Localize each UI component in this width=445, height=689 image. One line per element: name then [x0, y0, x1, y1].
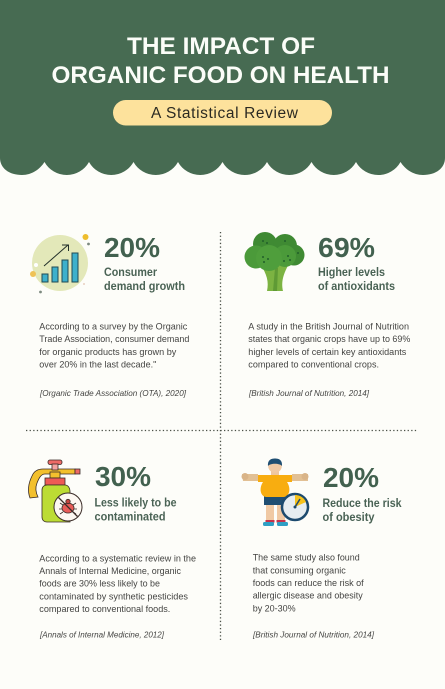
label: [104, 267, 185, 293]
description: over 20% in the last decade.": [39, 360, 156, 370]
description: Annals of Internal Medicine, organic: [39, 566, 181, 576]
panel: less contaminated: [29, 460, 196, 640]
description: Trade Association, consumer demand: [39, 334, 189, 344]
label: Higher levels: [318, 267, 385, 279]
description: foods can reduce the risk of: [253, 578, 364, 588]
panel: consumer demand growth: [30, 232, 189, 398]
citation: [British Journal of Nutrition, 2014]: [248, 388, 370, 398]
label: Less likely to be: [94, 498, 176, 510]
description: A study in the British Journal of Nutrition: [248, 322, 409, 332]
citation: [Annals of Internal Medicine, 2012]: [39, 630, 165, 640]
title: ORGANIC FOOD ON HEALTH: [52, 62, 390, 89]
description: by 20-30%: [253, 603, 296, 613]
label: [318, 267, 395, 293]
panel: reduced obesity: [242, 458, 402, 640]
description: According to a survey by the Organic: [39, 322, 188, 332]
description: contaminated by synthetic pesticides: [39, 592, 188, 602]
description: [39, 322, 189, 370]
description: higher levels of certain key antioxidants: [248, 347, 407, 357]
description: states that organic crops have up to 69%: [248, 334, 410, 344]
statistic 20%: 20%: [104, 232, 160, 263]
statistic 69%: 69%: [318, 232, 375, 263]
icon: bar chart with rising arrow: [30, 234, 90, 293]
description: foods are 30% less likely to be: [39, 579, 160, 589]
label: contaminated: [94, 512, 166, 524]
icon: person with stopwatch: [242, 458, 308, 526]
citation: [Organic Trade Association (OTA), 2020]: [39, 388, 187, 398]
icon: pesticide spray bottle with crossed bug: [29, 460, 82, 522]
description: compared to conventional foods.: [39, 604, 170, 614]
description: allergic disease and obesity: [253, 591, 363, 601]
label: demand growth: [104, 281, 185, 293]
citation: [British Journal of Nutrition, 2014]: [252, 630, 375, 640]
subtitle pill: A Statistical Review: [151, 105, 299, 122]
label: of antioxidants: [318, 281, 395, 293]
statistic 30%: 30%: [95, 461, 151, 492]
title: [52, 33, 390, 89]
description: for organic products has grown by: [39, 347, 177, 357]
title: THE IMPACT OF: [127, 33, 315, 60]
label: [94, 498, 176, 524]
description: that consuming organic: [253, 565, 346, 575]
description: The same study also found: [253, 553, 360, 563]
label: Consumer: [104, 267, 157, 279]
description: [248, 322, 410, 370]
description: [253, 553, 364, 613]
label: Reduce the risk: [322, 498, 402, 510]
label: of obesity: [322, 512, 375, 524]
label: [322, 498, 402, 524]
statistic 20%: 20%: [323, 462, 379, 493]
icon: broccoli: [244, 232, 304, 291]
description: [39, 553, 196, 614]
header banner with scalloped edge: [0, 0, 445, 175]
subtitle pill: [113, 100, 332, 126]
description: compared to conventional crops.: [248, 360, 379, 370]
panel: antioxidants: [244, 232, 410, 398]
description: According to a systematic review in the: [39, 553, 196, 563]
